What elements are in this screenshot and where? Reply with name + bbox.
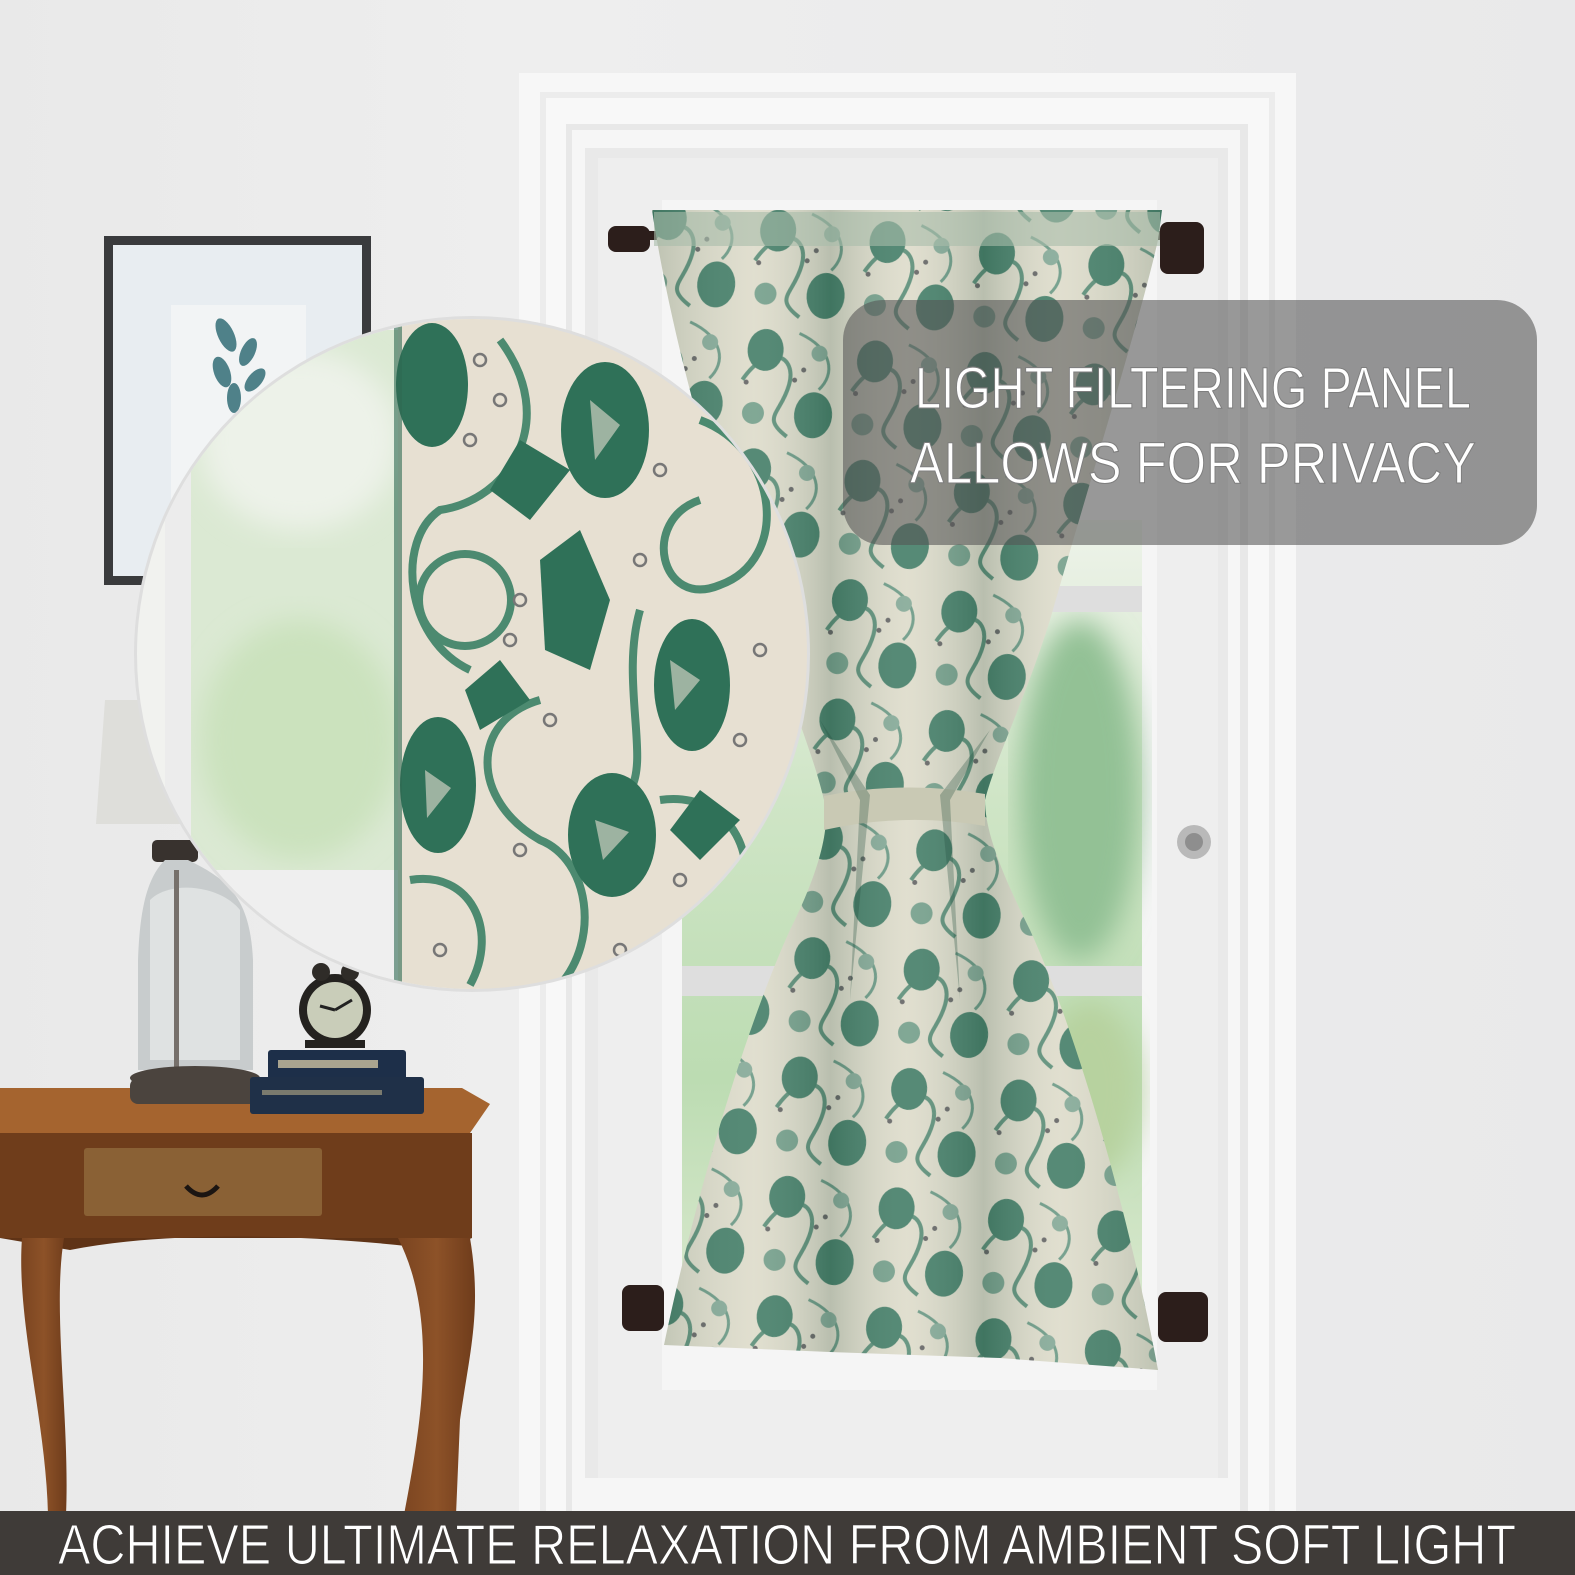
glass lamp xyxy=(130,840,260,1104)
framed picture xyxy=(104,236,371,585)
curtain tieback xyxy=(824,787,985,830)
callout: light filtering panel xyxy=(843,300,1537,545)
door knob xyxy=(1177,825,1211,859)
books xyxy=(250,1050,424,1114)
door panel with window xyxy=(598,158,1218,1478)
window view xyxy=(682,520,1142,1320)
door frame xyxy=(519,73,1296,1513)
curtain gather shadows xyxy=(820,720,990,1000)
magnifier circle: fabric close-up xyxy=(130,315,818,995)
floor xyxy=(0,1511,1575,1575)
alarm clock xyxy=(299,963,371,1048)
curtain rods xyxy=(608,222,1208,1342)
icon: leaves xyxy=(209,315,269,413)
callout: light filtering panel: ALLOWS FOR PRIVACY xyxy=(910,431,1476,496)
curtain panel xyxy=(652,210,1162,1370)
lamp shade xyxy=(96,700,190,824)
curtain header xyxy=(654,212,1160,246)
fabric close-up xyxy=(396,315,818,995)
side table xyxy=(0,1088,490,1515)
